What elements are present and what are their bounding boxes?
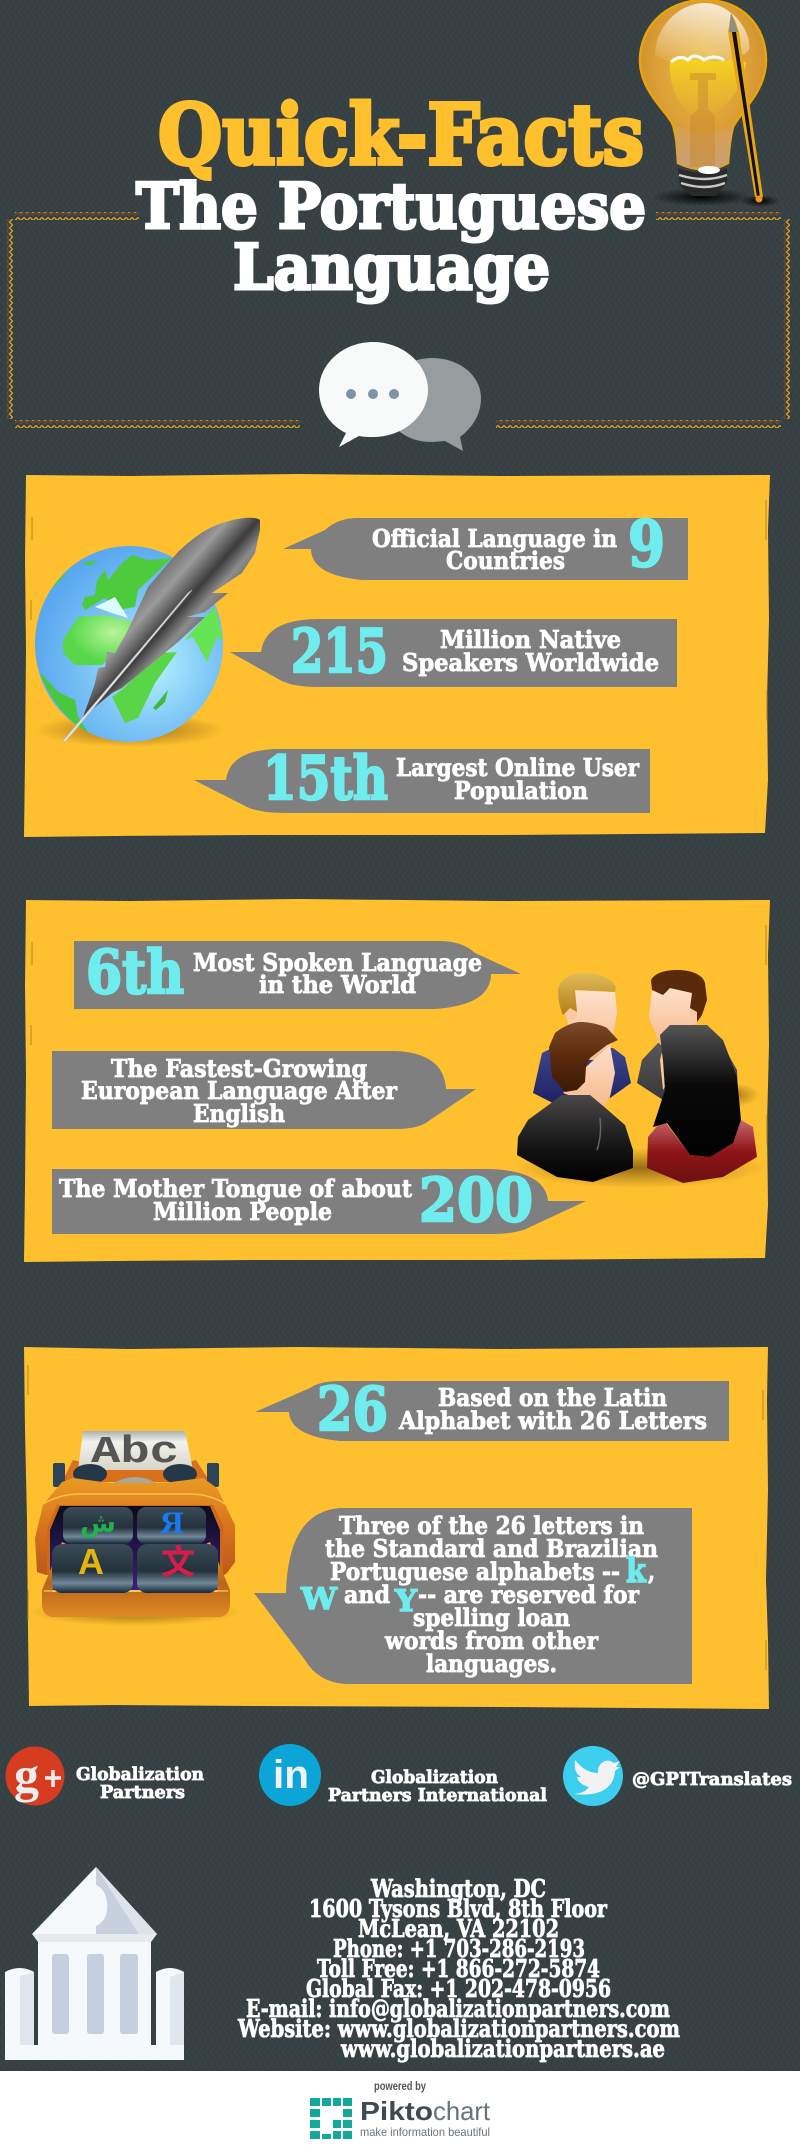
contact details: E-mail: info@globalizationpartners.com [246,1994,670,2023]
callout: official language [283,507,688,582]
callout: mother tongue [52,1166,586,1236]
callout: reserved letters: Y [394,1584,418,1619]
panel: language reach [24,474,770,837]
callout: official language: Official Language in [372,524,617,553]
social: Google Plus [6,1746,204,1806]
icon: office building [5,1867,184,2060]
callout: fastest growing [52,1051,476,1129]
callout: reserved letters: k [626,1551,647,1591]
callout: most spoken: Most Spoken Language [193,948,482,977]
callout: reserved letters: Three of the 26 letters in [339,1511,644,1540]
contact details: Washington, DC [370,1874,546,1903]
callout: mother tongue: 200 [419,1166,533,1236]
icon: globe and feather [35,518,260,747]
contact details: Global Fax: +1 202-478-0956 [306,1974,611,2003]
callout: reserved letters: Portuguese alphabets -- [330,1557,620,1586]
person: back left man [533,973,631,1103]
callout: mother tongue: The Mother Tongue of about [59,1174,412,1203]
contact details: Toll Free: +1 866-272-5874 [317,1954,600,1983]
contact details: 1600 Tysons Blvd, 8th Floor [309,1894,607,1923]
social: Twitter [563,1746,792,1806]
callout: mother tongue: Million People [153,1197,332,1226]
title line: Quick-Facts: Quick-Facts [158,86,644,184]
icon: group of people [515,970,765,1188]
callout: native speakers: Speakers Worldwide [402,648,659,677]
title line: Language: Language [233,230,550,304]
contact details: McLean, VA 22102 [358,1914,559,1943]
panel: alphabet [24,1347,769,1709]
icon: chat bubbles [319,342,481,451]
callout: online users: Population [454,776,588,805]
icon: typewriter with alphabets: Я [160,1507,184,1540]
callout: fastest growing: The Fastest-Growing [111,1054,367,1083]
callout: reserved letters: the Standard and Brazilian [325,1534,658,1563]
icon: typewriter with alphabets: 文 [161,1544,195,1582]
callout: reserved letters: , [648,1557,655,1586]
callout: most spoken [74,938,521,1009]
callout: native speakers: 215 [291,617,388,687]
contact details: Website: www.globalizationpartners.com [237,2014,680,2043]
social: Google Plus: Globalization [76,1764,204,1785]
social: LinkedIn: in [273,1753,309,1797]
social: LinkedIn: Partners International [328,1785,547,1806]
person: front man [517,1022,633,1182]
callout: reserved letters: languages. [426,1649,557,1678]
typewriter paper [78,1431,193,1470]
callout: online users: 15th [263,744,388,814]
icon: typewriter with alphabets: ش [80,1509,116,1539]
callout: official language: Countries [446,546,565,575]
social: Twitter: @GPITranslates [632,1769,792,1790]
footer: Piktochart [0,2071,800,2151]
callout: reserved letters: words from other [384,1626,598,1655]
title line: The Portuguese: The Portuguese [136,169,646,243]
person: back right man [637,970,738,1100]
footer: Piktochart: powered by [374,2079,426,2093]
callout: latin alphabet: Alphabet with 26 Letters [398,1406,707,1435]
callout: online users: Largest Online User [396,753,639,782]
callout: fastest growing: English [193,1099,285,1128]
contact details: www.globalizationpartners.ae [340,2034,665,2063]
social: LinkedIn: Globalization [371,1767,498,1788]
icon: typewriter with alphabets: A [78,1541,104,1582]
footer: Piktochart: chart [433,2096,491,2126]
callout: native speakers [230,617,677,687]
footer: Piktochart: Pikto [360,2096,433,2126]
callout: online users [194,744,650,814]
callout: reserved letters [254,1508,692,1684]
callout: fastest growing: European Language After [81,1076,397,1105]
icon: Piktochart logo [310,2098,352,2139]
icon: typewriter with alphabets [30,1431,240,1626]
callout: reserved letters: spelling loan [413,1603,570,1632]
social: Google Plus: g [14,1747,39,1803]
footer: Piktochart: make information beautiful [360,2125,490,2139]
contact details: Phone: +1 703-286-2193 [333,1934,585,1963]
person: front woman [647,1025,757,1183]
callout: official language: 9 [628,507,665,582]
callout: most spoken: in the World [259,970,416,999]
icon: typewriter with alphabets: Abc [91,1431,179,1474]
panel: speakers [24,899,770,1262]
social: LinkedIn [259,1744,547,1806]
callout: most spoken: 6th [86,938,184,1008]
social: Google Plus: Partners [100,1782,185,1803]
callout: latin alphabet: Based on the Latin [438,1383,667,1412]
callout: latin alphabet [255,1375,729,1445]
callout: latin alphabet: 26 [317,1375,388,1445]
callout: reserved letters: W [300,1582,338,1617]
icon: light bulb and pencil [640,0,780,207]
title [136,86,646,304]
callout: native speakers: Million Native [440,625,621,654]
callout: reserved letters: -- are reserved for [418,1580,639,1609]
zigzag title frame [6,212,790,428]
callout: reserved letters: and [344,1580,390,1609]
contact details [237,1874,680,2063]
